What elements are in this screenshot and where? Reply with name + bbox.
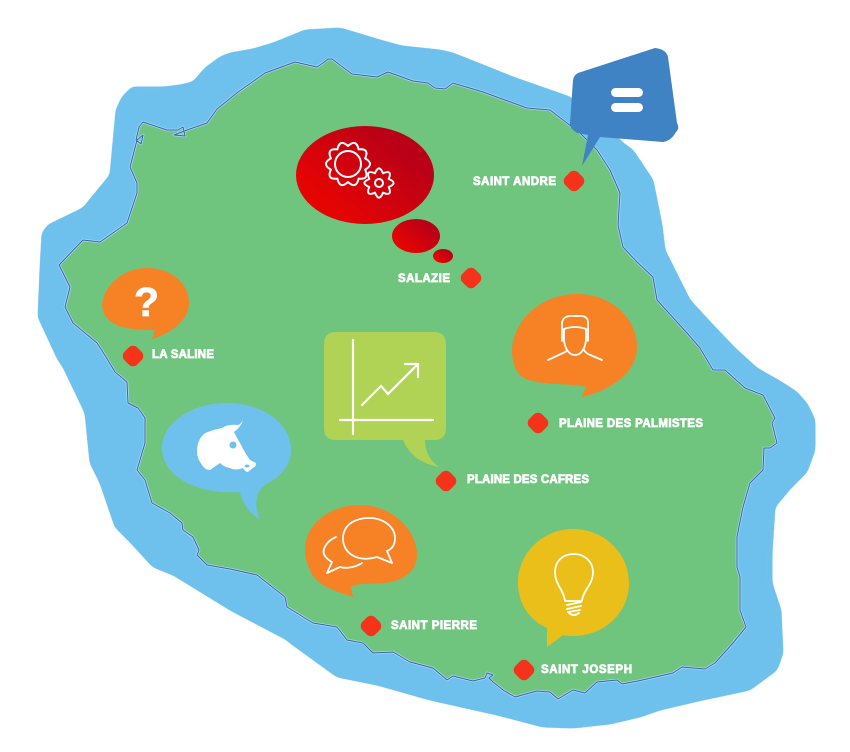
green bubble with growth chart icon xyxy=(324,332,446,467)
pin and label: Saint Pierre: SAINT PIERRE xyxy=(391,620,477,632)
orange bubble with person icon xyxy=(512,294,637,397)
yellow bubble with light bulb icon xyxy=(518,529,629,647)
pin and label: Saint Joseph: SAINT JOSEPH xyxy=(541,664,632,676)
pin and label: La Saline: LA SALINE xyxy=(152,349,214,361)
pin and label: Plaine des Cafres: PLAINE DES CAFRES xyxy=(467,474,589,486)
pin and label: Saint Andre: SAINT ANDRE xyxy=(473,176,556,188)
pin and label: Plaine des Palmistes xyxy=(525,410,703,436)
pin and label: Saint Joseph xyxy=(511,657,632,683)
island land mass xyxy=(59,59,777,699)
red thought bubble with gears icon xyxy=(296,126,453,263)
blue bubble with cow icon xyxy=(162,403,291,520)
pin and label: Salazie xyxy=(398,265,484,291)
orange bubble with conversation icon xyxy=(305,505,417,597)
blue speech bubble with bars icon xyxy=(570,48,678,166)
pin and label: Saint Andre xyxy=(473,168,587,194)
pin and label: Plaine des Cafres xyxy=(433,468,589,494)
pin and label: Saint Pierre xyxy=(358,613,477,639)
pin and label: Plaine des Palmistes: PLAINE DES PALMISTES xyxy=(559,418,703,430)
orange bubble with question mark: ? xyxy=(134,279,159,325)
pin and label: Salazie: SALAZIE xyxy=(398,273,450,285)
orange bubble with question mark xyxy=(102,268,189,339)
pin and label: La Saline xyxy=(120,343,214,369)
